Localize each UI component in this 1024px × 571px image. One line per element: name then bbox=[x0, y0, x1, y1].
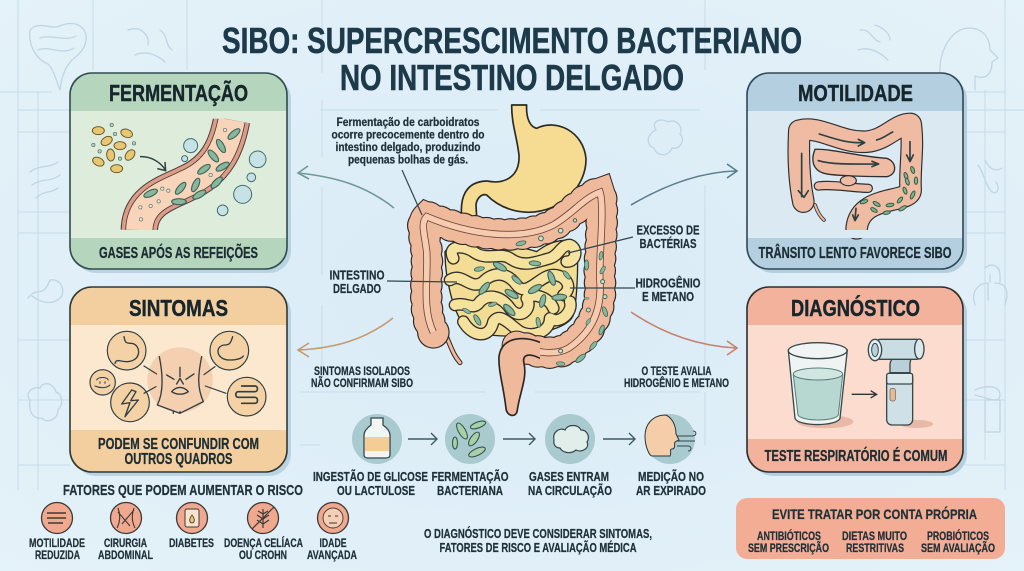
step label: gases bbox=[528, 470, 612, 498]
step label: gases: NA CIRCULAÇÃO bbox=[528, 483, 612, 498]
step label: fermentação bacteriana bbox=[432, 469, 509, 498]
illustration: glass and breath device bbox=[788, 339, 933, 428]
arrow: to diagnosis bbox=[631, 312, 737, 355]
label: motilidade reduzida bbox=[29, 538, 85, 562]
note: sintomas isolados bbox=[311, 366, 413, 390]
label: doença celíaca: OU CROHN bbox=[239, 550, 287, 562]
note: o teste avalia: O TESTE AVALIA bbox=[642, 366, 712, 378]
illustration: abdomen and symptom circles bbox=[90, 331, 266, 422]
label: doença celíaca bbox=[224, 537, 303, 562]
item: probióticos: PROBIÓTICOS bbox=[927, 530, 989, 543]
label: cirurgia abdominal: CIRURGIA bbox=[104, 538, 147, 550]
panel: sintomas bbox=[70, 287, 291, 476]
callout: fermentação de carboidratos: ocorre precocemente dentro do bbox=[332, 130, 484, 142]
illustration: fermentation in gut bbox=[91, 112, 266, 237]
colon bacteria bbox=[515, 219, 609, 366]
item: probióticos bbox=[921, 530, 995, 555]
label: diabetes: DIABETES bbox=[169, 538, 214, 550]
step label: fermentação bacteriana: BACTERIANA bbox=[437, 484, 503, 498]
label: motilidade reduzida: REDUZIDA bbox=[35, 550, 80, 562]
callout: fermentação de carboidratos: pequenas bolhas de gás. bbox=[348, 154, 468, 166]
callout: fermentação de carboidratos: intestino delgado, produzindo bbox=[336, 142, 480, 154]
arrow: to symptoms bbox=[298, 318, 393, 357]
icon: diabetes bbox=[176, 502, 208, 534]
caption: podem se confundir bbox=[98, 436, 259, 468]
step label: medição: MEDIÇÃO NO bbox=[638, 469, 704, 484]
icon: gas cloud bbox=[545, 414, 595, 464]
caption: teste respiratório: TESTE RESPIRATÓRIO É COMUM bbox=[764, 447, 948, 465]
panel: fermentação bbox=[70, 73, 291, 273]
caption: podem se confundir: OUTROS QUADROS bbox=[124, 451, 232, 468]
caption: podem se confundir: PODEM SE CONFUNDIR COM bbox=[98, 436, 259, 453]
arrow: step two bbox=[503, 433, 535, 445]
arrow: to fermentation bbox=[298, 166, 394, 208]
icon: cirurgia bbox=[110, 502, 142, 534]
item: dietas: RESTRITIVAS bbox=[846, 543, 904, 555]
label: doença celíaca: DOENÇA CELÍACA bbox=[224, 537, 303, 550]
label: hidrogênio e metano bbox=[570, 276, 701, 304]
label: intestino delgado: DELGADO bbox=[333, 282, 381, 296]
item: antibióticos: ANTIBIÓTICOS bbox=[757, 530, 821, 543]
label: cirurgia abdominal bbox=[98, 538, 153, 562]
label: excesso de bactérias: EXCESSO DE bbox=[636, 224, 700, 238]
label: idade avançada bbox=[307, 538, 357, 562]
risk factors row bbox=[29, 502, 357, 562]
item: dietas: DIETAS MUITO bbox=[842, 531, 907, 543]
arrow: step three bbox=[603, 433, 635, 445]
heading: sintomas: SINTOMAS bbox=[129, 295, 228, 321]
panel: diagnóstico bbox=[747, 287, 967, 476]
step label: medição: AR EXPIRADO bbox=[636, 484, 706, 498]
title: NO INTESTINO DELGADO bbox=[340, 57, 684, 98]
label: motilidade reduzida: MOTILIDADE bbox=[29, 538, 85, 550]
step label: medição bbox=[636, 469, 706, 498]
small intestine bbox=[445, 240, 578, 336]
label: cirurgia abdominal: ABDOMINAL bbox=[98, 550, 153, 562]
icon: bacteria bbox=[445, 414, 495, 464]
step label: ingestão: OU LACTULOSE bbox=[337, 484, 415, 498]
note: sintomas isolados: NÃO CONFIRMAM SIBO bbox=[311, 377, 413, 390]
text: diagnosis note: FATORES DE RISCO E AVALIAÇÃO MÉDICA bbox=[440, 540, 636, 555]
note: sintomas isolados: SINTOMAS ISOLADOS bbox=[314, 366, 410, 378]
item: antibióticos: SEM PRESCRIÇÃO bbox=[748, 542, 829, 555]
icon: glucose bottle bbox=[352, 414, 402, 464]
icon: doença celíaca bbox=[248, 502, 278, 534]
label: excesso de bactérias: BACTÉRIAS bbox=[640, 236, 696, 251]
heading: diagnóstico: DIAGNÓSTICO bbox=[791, 294, 920, 321]
item: antibióticos bbox=[748, 530, 829, 555]
text: diagnosis note bbox=[424, 526, 652, 555]
label: hidrogênio e metano: HIDROGÊNIO bbox=[636, 276, 701, 290]
step label: gases: GASES ENTRAM bbox=[529, 470, 609, 484]
item: probióticos: SEM AVALIAÇÃO bbox=[921, 542, 995, 555]
step label: ingestão: INGESTÃO DE GLICOSE bbox=[313, 469, 428, 484]
step label: ingestão bbox=[313, 469, 428, 498]
callout: fermentação de carboidratos: Fermentação de carboidratos bbox=[336, 117, 480, 129]
callout: fermentação de carboidratos bbox=[332, 117, 484, 215]
large intestine bbox=[423, 192, 602, 363]
heading: motilidade: MOTILIDADE bbox=[798, 80, 913, 106]
step label: fermentação bacteriana: FERMENTAÇÃO bbox=[432, 469, 509, 484]
note: o teste avalia: HIDROGÊNIO E METANO bbox=[624, 377, 729, 390]
caption: gases após refeições: GASES APÓS AS REFEIÇÕES bbox=[99, 244, 258, 262]
text: diagnosis note: O DIAGNÓSTICO DEVE CONSIDERAR SINTOMAS, bbox=[424, 526, 652, 541]
caption: trânsito lento: TRÂNSITO LENTO FAVORECE SIBO bbox=[758, 244, 952, 262]
panel: motilidade bbox=[747, 73, 967, 273]
panel: evite tratar bbox=[736, 498, 1005, 559]
icon: idade bbox=[318, 502, 348, 534]
label: hidrogênio e metano: E METANO bbox=[642, 290, 694, 304]
stomach bbox=[461, 105, 586, 217]
flow: test steps bbox=[313, 414, 706, 498]
note: o teste avalia bbox=[624, 366, 729, 390]
rectum bbox=[499, 339, 540, 415]
label: intestino delgado: INTESTINO bbox=[330, 268, 385, 282]
background icons bbox=[28, 24, 1007, 432]
heading: risk factors: FATORES QUE PODEM AUMENTAR O RISCO bbox=[63, 482, 303, 499]
illustration: slow transit colon bbox=[798, 124, 918, 238]
label: idade avançada: IDADE bbox=[320, 538, 347, 550]
heading: evite tratar: EVITE TRATAR POR CONTA PRÓPRIA bbox=[772, 505, 977, 522]
arrow: step one bbox=[408, 433, 437, 445]
icon: motilidade bbox=[42, 502, 72, 534]
label: excesso de bactérias bbox=[568, 224, 700, 253]
item: dietas bbox=[842, 531, 907, 555]
anatomy: stomach and intestines bbox=[423, 105, 609, 415]
label: intestino delgado bbox=[330, 268, 457, 296]
title bbox=[222, 20, 802, 98]
title: SIBO: SUPERCRESCIMENTO BACTERIANO bbox=[222, 20, 802, 61]
arrow: to motility bbox=[631, 164, 737, 205]
icon: head exhaling bbox=[645, 414, 696, 464]
heading: fermentação: FERMENTAÇÃO bbox=[109, 79, 248, 106]
label: idade avançada: AVANÇADA bbox=[307, 550, 357, 562]
